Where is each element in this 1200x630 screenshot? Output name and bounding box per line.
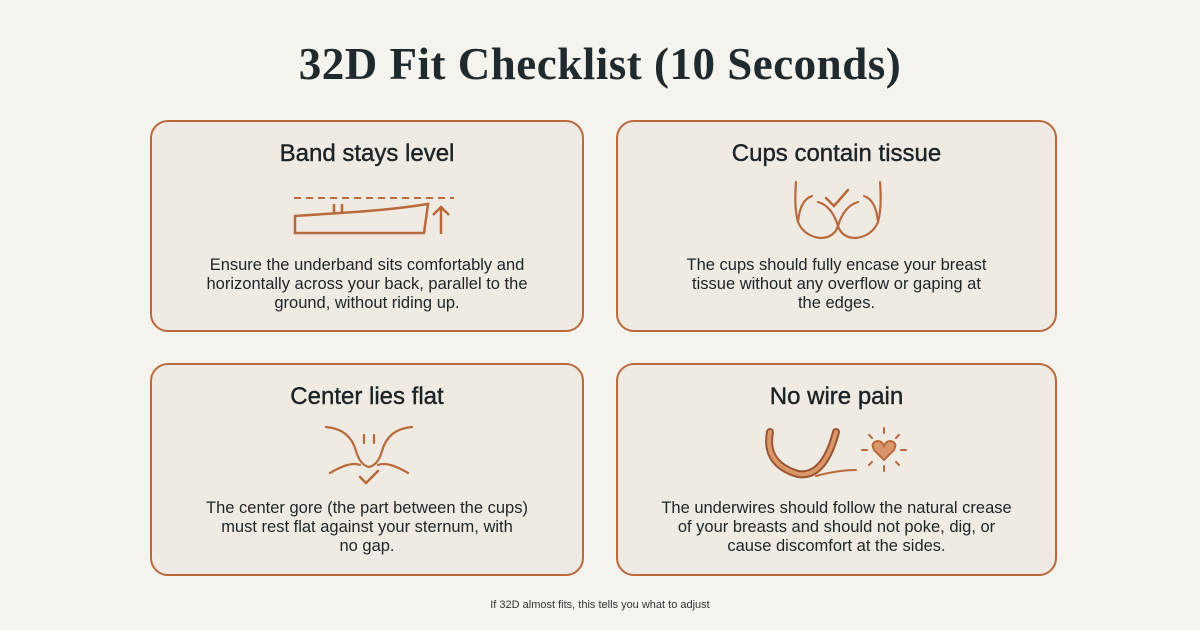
- body text: tissue without any overflow or gaping at: [692, 275, 981, 293]
- body text: horizontally across your back, parallel to the: [206, 275, 528, 293]
- heading: Cups contain tissue: [732, 140, 941, 167]
- body text: [206, 499, 528, 555]
- body text: no gap.: [339, 537, 395, 555]
- body text: the edges.: [798, 294, 875, 312]
- body text: cause discomfort at the sides.: [727, 537, 946, 555]
- body text: The underwires should follow the natural crease: [661, 499, 1012, 517]
- body text: must rest flat against your sternum, with: [221, 518, 513, 536]
- body text: [661, 499, 1012, 555]
- panel: cups contain tissue: [616, 120, 1057, 332]
- body text: Ensure the underband sits comfortably and: [210, 256, 524, 274]
- panel: band stays level: [150, 120, 584, 332]
- body text: ground, without riding up.: [274, 294, 460, 312]
- icon: underwire with heart: [765, 427, 907, 478]
- icon: bra with check: [794, 180, 882, 240]
- body text: The cups should fully encase your breast: [687, 256, 986, 274]
- panel: center lies flat: [150, 363, 584, 576]
- body text: [206, 256, 528, 312]
- footer note: If 32D almost fits, this tells you what to adjust: [490, 599, 710, 611]
- icon: level band: [294, 197, 454, 234]
- panel: no wire pain: [616, 363, 1057, 576]
- body text: The center gore (the part between the cups): [206, 499, 528, 517]
- heading: No wire pain: [770, 383, 903, 410]
- body text: of your breasts and should not poke, dig, or: [678, 518, 995, 536]
- title: 32D Fit Checklist (10 Seconds): [299, 39, 901, 89]
- heading: Band stays level: [280, 140, 454, 167]
- icon: center gore: [324, 426, 414, 485]
- heading: Center lies flat: [290, 383, 444, 410]
- body text: [686, 256, 986, 312]
